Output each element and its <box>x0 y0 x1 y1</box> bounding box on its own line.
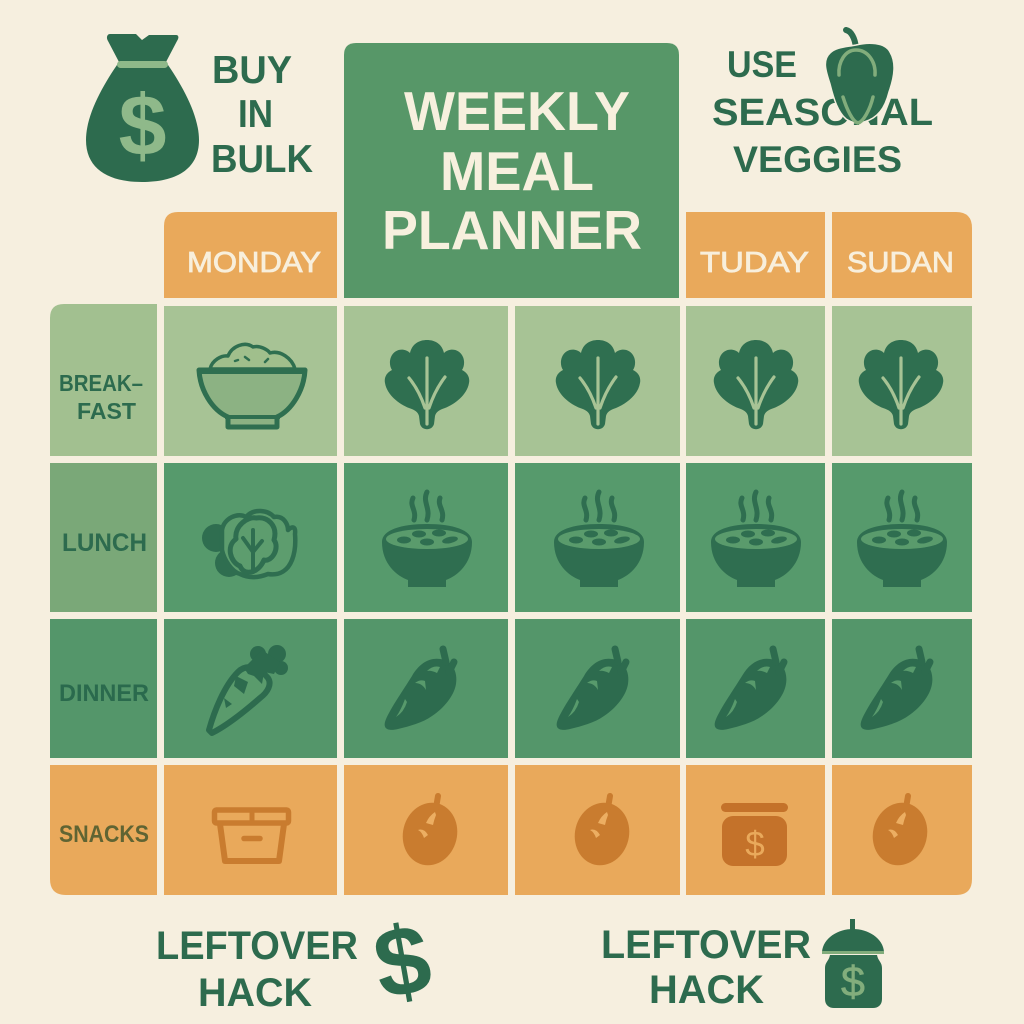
icon: pepper <box>385 649 456 730</box>
tip: buy in bulk: IN <box>238 93 273 136</box>
icon: money jar <box>721 803 788 866</box>
tip: leftover hack with dollar: HACK <box>198 971 312 1015</box>
icon: money jar: $ <box>745 825 765 864</box>
icon: money bag: $ <box>119 78 166 174</box>
tip: leftover hack with dollar: LEFTOVER <box>156 924 358 968</box>
breakfast row cells <box>164 306 972 456</box>
lunch row cells <box>164 463 972 612</box>
dinner row cells <box>164 619 972 758</box>
icon: soup bowl <box>711 492 801 587</box>
icon: spinach leaf <box>714 340 798 429</box>
icon: dollar sign: $ <box>366 902 439 1020</box>
icon: soup bowl <box>554 492 644 587</box>
row label: dinner <box>50 619 157 758</box>
tip: use seasonal veggies: USE <box>727 44 797 85</box>
tip: buy in bulk: BUY <box>212 49 292 92</box>
icon: plum <box>866 796 934 871</box>
row label: lunch: LUNCH <box>62 529 147 557</box>
icon: food container <box>214 810 288 861</box>
row label: breakfast: FAST <box>77 398 136 424</box>
row label: snacks <box>50 765 157 895</box>
icon: pepper <box>557 649 628 730</box>
icon: pepper <box>715 649 786 730</box>
title panel <box>344 43 679 298</box>
snacks row cells <box>164 765 972 895</box>
icon: soup bowl <box>857 492 947 587</box>
tip: use seasonal veggies: VEGGIES <box>733 139 902 180</box>
icon: spinach leaf <box>385 340 469 429</box>
row label: dinner: DINNER <box>59 680 149 707</box>
tip: leftover hack with jar: HACK <box>649 968 764 1012</box>
row label: breakfast <box>50 304 157 456</box>
tip: buy in bulk: BULK <box>211 138 313 181</box>
tip: leftover hack with dollar <box>156 902 439 1020</box>
icon: spinach leaf <box>859 340 943 429</box>
icon: carrot <box>209 645 288 733</box>
title panel: MEAL <box>440 140 594 202</box>
row label: lunch <box>50 463 157 612</box>
tip: buy in bulk <box>86 34 313 182</box>
icon: lidded jar <box>822 919 884 1008</box>
icon: lidded jar: $ <box>841 958 865 1006</box>
header: sudan: SUDAN <box>847 247 954 279</box>
header: sudan <box>832 212 972 298</box>
header: tuday: TUDAY <box>700 247 809 279</box>
row label: breakfast: BREAK– <box>59 370 143 396</box>
icon: plum <box>396 796 464 871</box>
icon: pepper <box>861 649 932 730</box>
icon: bell pepper <box>825 30 894 123</box>
header: monday: MONDAY <box>187 247 321 279</box>
icon: plum <box>568 796 636 871</box>
title panel: PLANNER <box>382 199 642 261</box>
icon: soup bowl <box>382 492 472 587</box>
icon: spinach leaf <box>556 340 640 429</box>
tip: use seasonal veggies: SEASONAL <box>712 92 933 134</box>
icon: money bag <box>86 34 199 182</box>
tip: leftover hack with jar: LEFTOVER <box>601 923 811 967</box>
tip: use seasonal veggies <box>712 30 933 180</box>
icon: rice bowl <box>198 344 306 427</box>
header: monday <box>164 212 337 298</box>
tip: leftover hack with jar <box>601 919 884 1012</box>
header: tuday <box>686 212 825 298</box>
icon: lettuce <box>202 511 295 577</box>
title panel: WEEKLY <box>404 80 630 142</box>
row label: snacks: SNACKS <box>59 821 149 848</box>
